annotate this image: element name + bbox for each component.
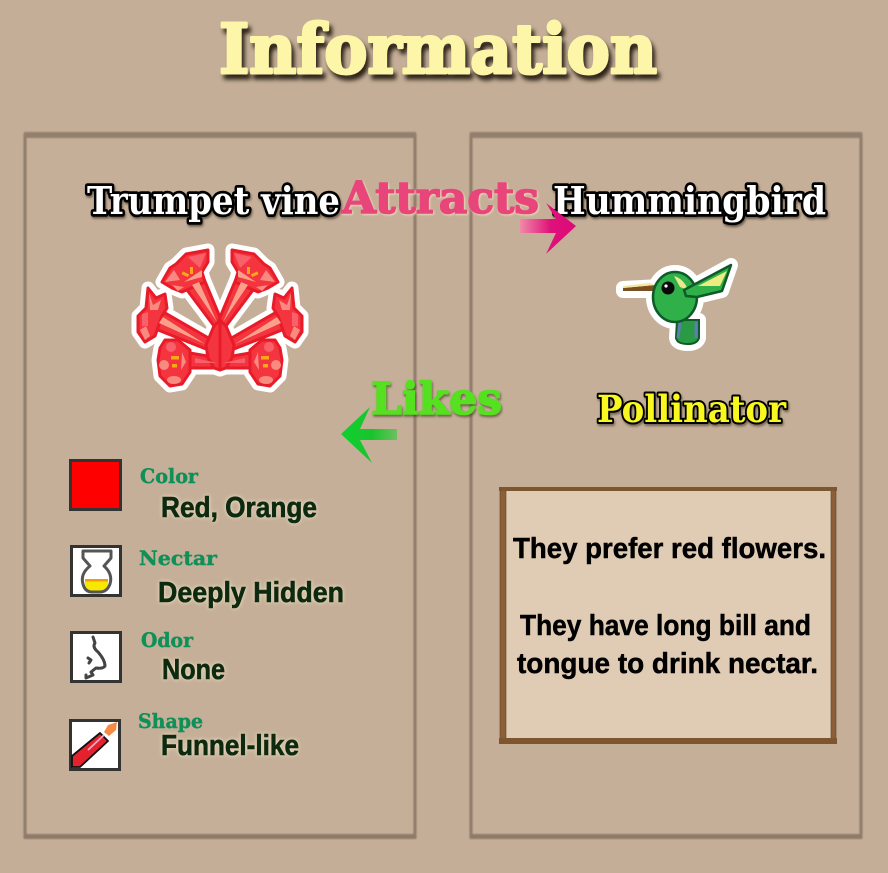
arrow: likes xyxy=(341,407,397,463)
odor label: Odor xyxy=(141,628,193,652)
description text: tongue to drink nectar. xyxy=(517,648,818,680)
nectar value: Deeply Hidden xyxy=(158,577,344,609)
arrow: attracts xyxy=(520,203,576,254)
panel: left plant panel xyxy=(24,132,416,839)
icon: trumpet vine flower xyxy=(138,250,302,386)
icon: hummingbird xyxy=(623,265,731,344)
nectar label: Nectar xyxy=(139,546,217,570)
description text xyxy=(513,533,826,680)
shape value: Funnel-like xyxy=(161,730,299,762)
attracts label: Attracts xyxy=(341,173,539,224)
icon: odor nose xyxy=(72,632,120,682)
odor value: None xyxy=(162,654,225,686)
likes label: Likes xyxy=(371,374,502,425)
pollinator name: Hummingbird xyxy=(553,178,826,223)
color label: Color xyxy=(140,464,198,488)
panel: right pollinator panel xyxy=(470,132,862,839)
color value: Red, Orange xyxy=(161,492,317,524)
shape label: Shape xyxy=(138,709,203,733)
pollinator label: Pollinator xyxy=(597,387,786,431)
icon: color swatch xyxy=(70,460,120,510)
icon: funnel shape xyxy=(70,720,120,770)
plant name: Trumpet vine xyxy=(87,178,340,223)
icon: nectar vase xyxy=(72,546,120,596)
description text: They have long bill and xyxy=(520,610,811,642)
title: Information xyxy=(219,10,657,90)
description text: They prefer red flowers. xyxy=(513,533,826,565)
panel: description board xyxy=(499,487,837,744)
